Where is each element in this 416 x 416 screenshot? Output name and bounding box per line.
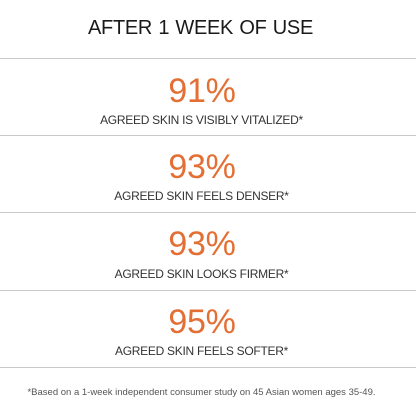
stat: 93% denser: 93% bbox=[168, 148, 236, 186]
stat: 93% firmer bbox=[114, 225, 288, 281]
stat: 93% firmer: 93% bbox=[168, 225, 236, 263]
stat: 93% denser bbox=[114, 148, 289, 203]
stat: 91% vitalized: 91% bbox=[168, 72, 236, 110]
stat: 93% firmer: AGREED SKIN LOOKS FIRMER* bbox=[115, 267, 288, 281]
stat: 95% softer bbox=[115, 303, 288, 358]
title: AFTER 1 WEEK OF USE bbox=[88, 17, 313, 39]
stat: 91% vitalized: AGREED SKIN IS VISIBLY VITALIZED* bbox=[100, 113, 303, 127]
stat: 95% softer: 95% bbox=[168, 303, 236, 341]
footnote: *Based on a 1-week independent consumer study on 45 Asian women ages 35-49. bbox=[27, 387, 376, 398]
stat: 91% vitalized bbox=[100, 72, 303, 127]
stat: 95% softer: AGREED SKIN FEELS SOFTER* bbox=[115, 344, 288, 358]
stat: 93% denser: AGREED SKIN FEELS DENSER* bbox=[114, 189, 289, 203]
